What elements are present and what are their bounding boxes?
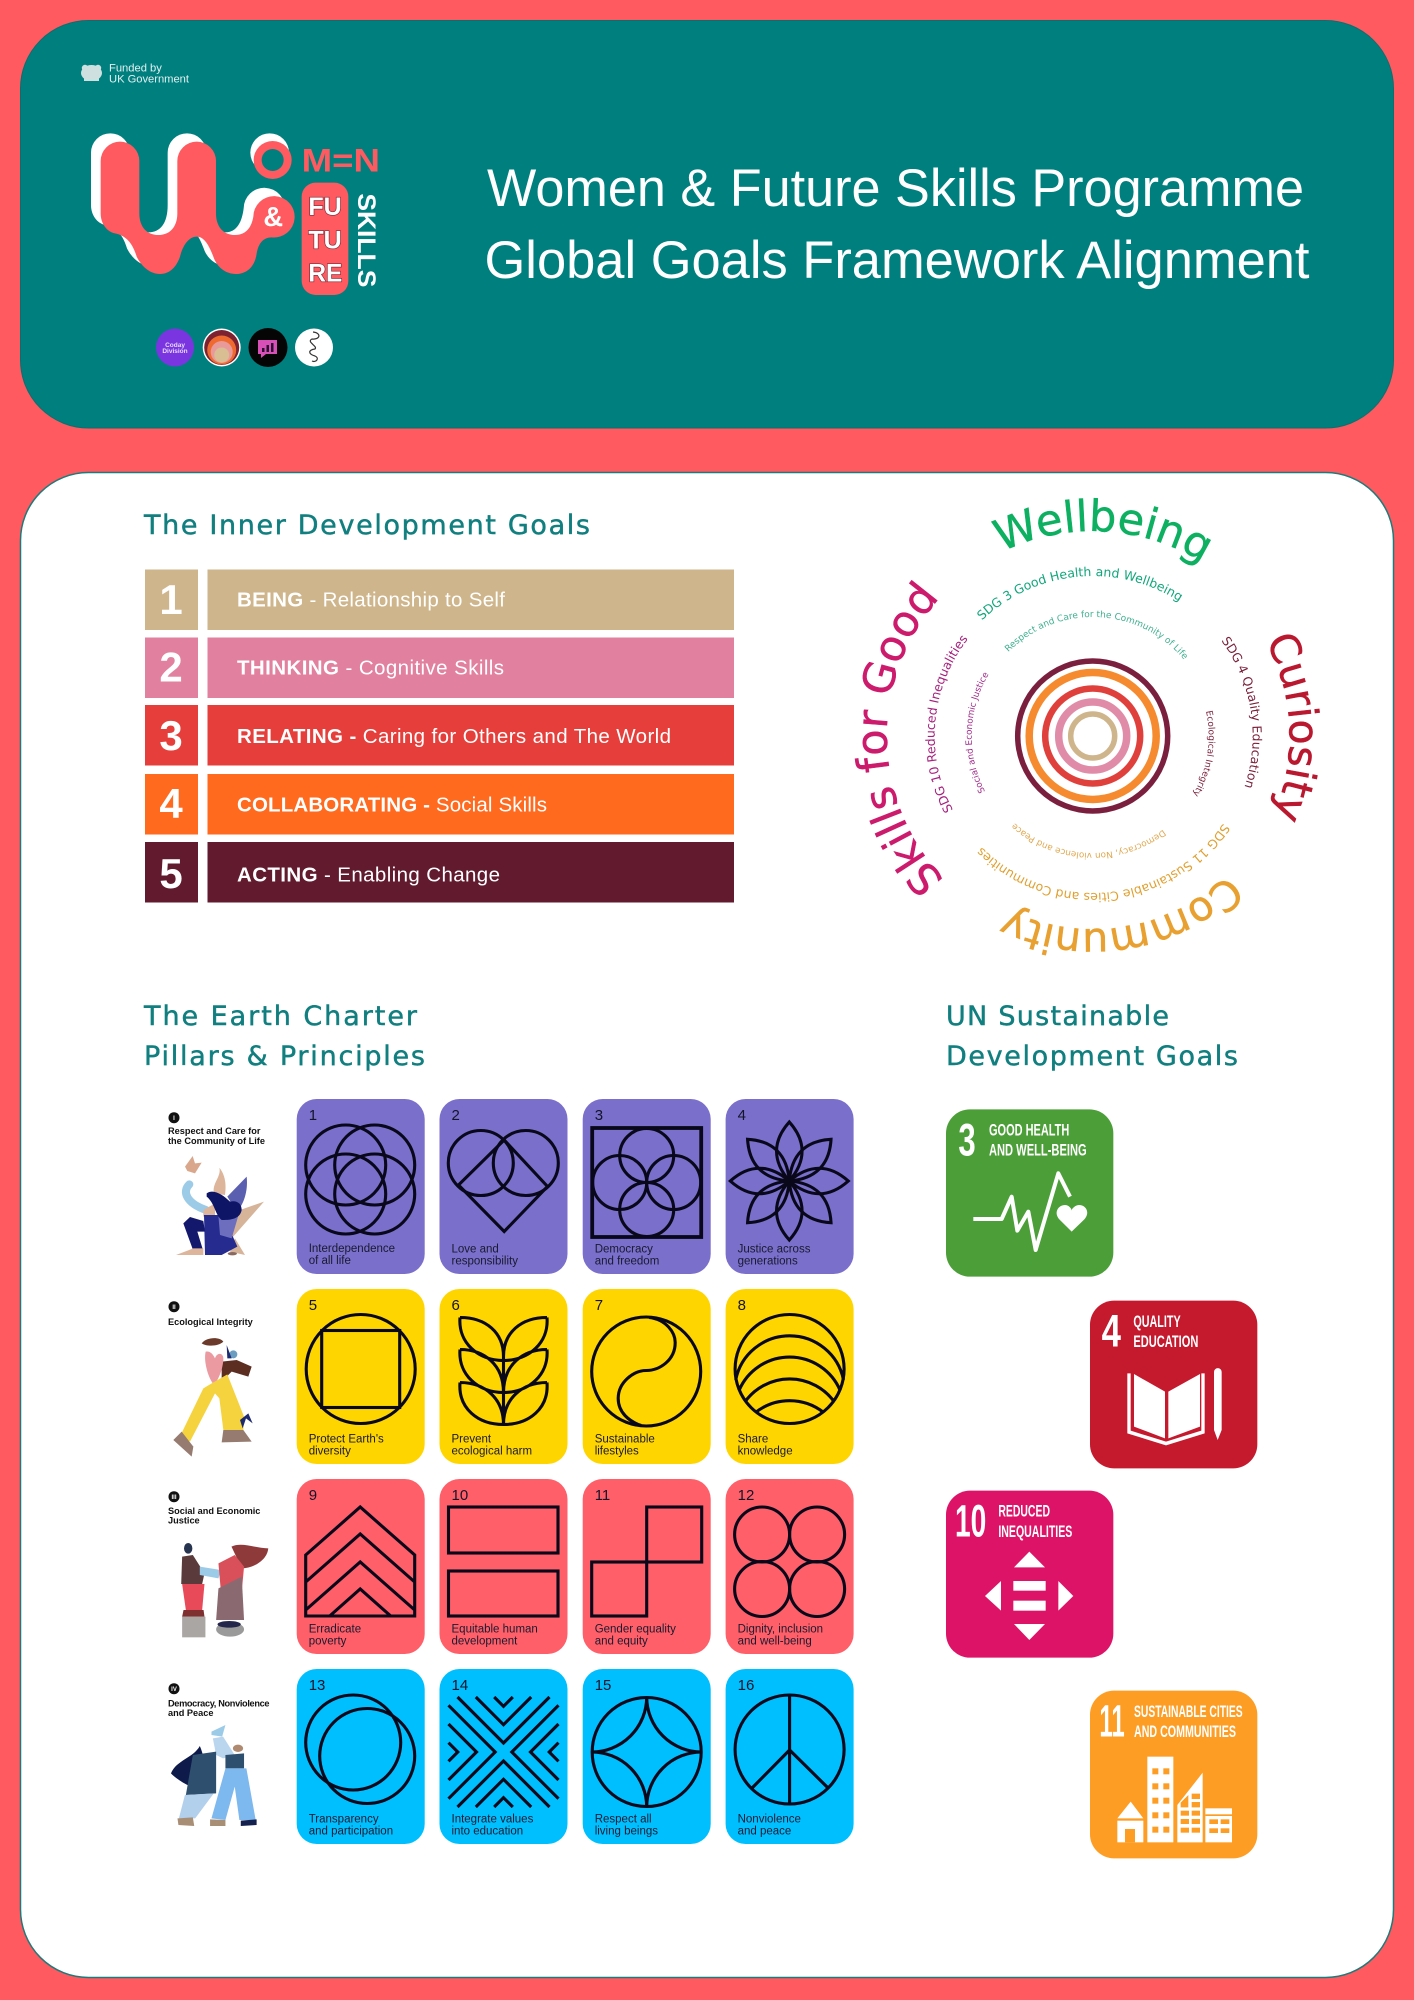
earth charter pillar IV: democracy, nonviolence and peace: Democracy, Nonviolence [168, 1699, 270, 1709]
card 5: protect earth's diversity: 5 [309, 1297, 317, 1314]
earth charter pillar II: ecological integrity: II [172, 1305, 176, 1311]
partner logos: Division [162, 348, 188, 355]
card 13: transparency and participation: Transparency [309, 1814, 379, 1826]
card 3: democracy and freedom: Democracy [595, 1244, 653, 1256]
ring text: Wellbeing: Wellbeing [991, 498, 1211, 566]
heading: The Earth Charter [143, 1001, 425, 1072]
SDG tile 3: good health and well-being [946, 1109, 1113, 1277]
programme logo: Women & Future Skills: & [263, 201, 283, 232]
earth charter pillar I: respect and care: Respect and Care for [168, 1126, 261, 1136]
card 4: justice across generations: Justice across [738, 1244, 811, 1256]
SDG tile 4: quality education: 4 [1102, 1306, 1121, 1357]
ring text: Wellbeing [977, 498, 1211, 660]
card 2: love and responsibility: responsibility [452, 1256, 518, 1268]
illustration: two figures high five [171, 1725, 257, 1826]
SDG tile 10: reduced inequalities: 10 [955, 1496, 986, 1547]
SDG tile 4: quality education: QUALITY [1133, 1312, 1181, 1331]
card 1: interdependence [297, 1099, 425, 1274]
earth charter pillar III: social and economic justice: Social and Economic [168, 1506, 260, 1516]
card 4: justice across generations: 4 [738, 1107, 746, 1124]
programme logo: Women & Future Skills: TU [308, 227, 342, 255]
principle cards grid [297, 1099, 854, 1844]
card 5: protect earth's diversity: Protect Earth's [309, 1434, 384, 1446]
ring text: Wellbeing: Respect and Care for the Community of Life [1004, 610, 1187, 660]
card 14: integrate values into education: Integrate values [452, 1814, 534, 1826]
partner logos: Coday [165, 342, 185, 349]
programme logo: Women & Future Skills [91, 133, 380, 295]
card 6: prevent ecological harm: Prevent [452, 1434, 492, 1446]
card 1: interdependence: 1 [309, 1107, 317, 1124]
card 13: transparency and participation: and participation [309, 1826, 393, 1838]
earth charter pillar III: social and economic justice: Justice [168, 1516, 200, 1526]
SDG tile 11: sustainable cities and communities: SUSTAINABLE CITIES [1134, 1702, 1243, 1721]
card 8: share knowledge [726, 1289, 854, 1464]
funder credit: UK Government [81, 62, 190, 86]
card 11: gender equality and equity: and equity [595, 1636, 648, 1648]
SDG tile 10: reduced inequalities: REDUCED [998, 1502, 1050, 1521]
title: Global Goals Framework Alignment [484, 231, 1310, 290]
card 3: democracy and freedom: and freedom [595, 1256, 659, 1268]
SDG tile 11: sustainable cities and communities: 11 [1099, 1696, 1125, 1747]
row 5: acting [145, 842, 734, 902]
earth charter pillar IV: democracy, nonviolence and peace: and Peace [168, 1708, 213, 1718]
earth charter pillar II: ecological integrity [168, 1301, 254, 1457]
card 15: respect all living beings: 15 [595, 1677, 611, 1694]
earth charter pillar III: social and economic justice [168, 1491, 268, 1637]
card 8: share knowledge: knowledge [738, 1446, 793, 1458]
programme logo: Women & Future Skills: SKILLS [352, 193, 380, 287]
heading: UN Sustainable Development Goals: Development Goals [946, 1041, 1238, 1072]
card 12: dignity, inclusion and well-being: Dignity, inclusion [738, 1624, 823, 1636]
concentric goal rings [1018, 661, 1168, 811]
SDG tile 4: quality education [1090, 1301, 1257, 1468]
row 4: collaborating: COLLABORATING - Social Skills [237, 794, 547, 816]
ring text: Curiosity: Ecological Integrity [1192, 710, 1216, 797]
funder credit: UK Government: Funded by [109, 62, 162, 74]
card 9: eradicate poverty: poverty [309, 1636, 347, 1648]
card 3: democracy and freedom [583, 1099, 711, 1274]
heading: UN Sustainable Development Goals: UN Sustainable [946, 1001, 1169, 1032]
SDG tile 11: sustainable cities and communities [1090, 1691, 1257, 1858]
ring text: Curiosity [1192, 634, 1320, 823]
card 16: nonviolence and peace: Nonviolence [738, 1814, 801, 1826]
card 10: equitable human development: 10 [452, 1487, 468, 1504]
card 12: dignity, inclusion and well-being: 12 [738, 1487, 754, 1504]
programme logo: Women & Future Skills: RE [308, 260, 342, 288]
partner logos [156, 328, 333, 367]
programme logo: Women & Future Skills: M=N [302, 142, 380, 178]
row 3: relating: 3 [159, 712, 183, 759]
SDG tile 10: reduced inequalities: INEQUALITIES [998, 1522, 1072, 1541]
card 15: respect all living beings: Respect all [595, 1814, 652, 1826]
earth charter pillar IV: democracy, nonviolence and peace: IV [171, 1687, 177, 1693]
title [484, 159, 1310, 290]
illustration: two figures shaking hands [181, 1543, 268, 1637]
card 4: justice across generations: generations [738, 1256, 798, 1268]
panel: header banner [20, 20, 1394, 428]
card 16: nonviolence and peace: and peace [738, 1826, 791, 1838]
ring text: Skills for Good: Skills for Good [854, 580, 942, 895]
card 7: sustainable lifestyles: 7 [595, 1297, 603, 1314]
card 11: gender equality and equity [583, 1479, 711, 1654]
ring text: Community: SDG 11 Sustainable Cities and Communities [978, 824, 1230, 902]
panel: main white content [20, 472, 1394, 1978]
card 6: prevent ecological harm [440, 1289, 568, 1464]
illustration: walking figure [173, 1338, 253, 1457]
card 2: love and responsibility: 2 [452, 1107, 460, 1124]
card 5: protect earth's diversity: diversity [309, 1446, 351, 1458]
row 1: being: 1 [159, 576, 183, 623]
card 15: respect all living beings: living beings [595, 1826, 658, 1838]
heading: The Earth Charter: The Earth Charter [143, 1001, 418, 1032]
card 11: gender equality and equity: 11 [595, 1487, 610, 1504]
card 2: love and responsibility [440, 1099, 568, 1274]
heading: The Inner Development Goals: The Inner Development Goals [143, 510, 590, 541]
card 7: sustainable lifestyles: lifestyles [595, 1446, 639, 1458]
SDG tile 3: good health and well-being: AND WELL-BEING [989, 1141, 1087, 1160]
icon: open book and pencil [1127, 1368, 1222, 1445]
card 7: sustainable lifestyles [583, 1289, 711, 1464]
card 14: integrate values into education [440, 1669, 568, 1844]
earth charter pillar I: respect and care: the Community of Life [168, 1136, 265, 1146]
card 11: gender equality and equity: Gender equality [595, 1624, 676, 1636]
card 10: equitable human development: Equitable human [452, 1624, 538, 1636]
card 9: eradicate poverty: 9 [309, 1487, 317, 1504]
card 6: prevent ecological harm: 6 [452, 1297, 460, 1314]
card 2: love and responsibility: Love and [452, 1244, 499, 1256]
icon: city buildings [1117, 1757, 1232, 1842]
ring text: Community: Community [999, 881, 1240, 956]
row 4: collaborating [145, 774, 734, 834]
SDG tile 10: reduced inequalities [946, 1491, 1113, 1658]
row 5: acting: 5 [159, 850, 183, 897]
ring text: Curiosity: SDG 4 Quality Education [1222, 636, 1262, 788]
earth charter pillar I: respect and care: I [173, 1116, 175, 1122]
card 14: integrate values into education: into education [452, 1826, 523, 1838]
row 3: relating: RELATING - Caring for Others and The World [237, 725, 671, 748]
illustration: figure with leaves [176, 1156, 264, 1255]
earth charter pillar II: ecological integrity: Ecological Integrity [168, 1317, 254, 1327]
card 12: dignity, inclusion and well-being: and well-being [738, 1636, 812, 1648]
card 13: transparency and participation: 13 [309, 1677, 325, 1694]
card 15: respect all living beings [583, 1669, 711, 1844]
row 1: being [145, 570, 734, 630]
card 12: dignity, inclusion and well-being [726, 1479, 854, 1654]
card 14: integrate values into education: 14 [452, 1677, 468, 1694]
card 4: justice across generations [726, 1099, 854, 1274]
heading: The Earth Charter: Pillars & Principles [144, 1041, 425, 1072]
heading: UN Sustainable Development Goals [946, 1001, 1238, 1072]
ring text: Community: Democracy, Non violence and Peace [1012, 824, 1166, 860]
programme logo: Women & Future Skills: FU [308, 193, 342, 221]
circular framework diagram [854, 498, 1320, 956]
row 1: being: BEING - Relationship to Self [237, 588, 505, 612]
SDG tile 11: sustainable cities and communities: AND COMMUNITIES [1134, 1722, 1236, 1741]
card 8: share knowledge: 8 [738, 1297, 746, 1314]
row 2: thinking [145, 638, 734, 698]
ring text: Skills for Good: SDG 10 Reduced Inequalities [925, 636, 967, 813]
ring text: Skills for Good: Social and Economic Justice [965, 672, 988, 794]
SDG tile 3: good health and well-being: 3 [958, 1114, 976, 1165]
earth charter pillar I: respect and care [168, 1112, 265, 1255]
card 16: nonviolence and peace: 16 [738, 1677, 754, 1694]
card 6: prevent ecological harm: ecological harm [452, 1446, 532, 1458]
row 2: thinking: THINKING - Cognitive Skills [237, 656, 504, 680]
card 10: equitable human development [440, 1479, 568, 1654]
card 1: interdependence: of all life [309, 1255, 351, 1267]
row 5: acting: ACTING - Enabling Change [237, 864, 500, 886]
card 5: protect earth's diversity [297, 1289, 425, 1464]
ring text: Community [978, 824, 1240, 956]
ring text: Skills for Good [854, 580, 988, 895]
earth charter pillar IV: democracy, nonviolence and peace [168, 1683, 270, 1826]
row 4: collaborating: 4 [159, 780, 183, 827]
ring text: Curiosity: Curiosity [1270, 634, 1320, 823]
card 3: democracy and freedom: 3 [595, 1107, 603, 1124]
title: Women & Future Skills Programme [487, 159, 1304, 218]
card 8: share knowledge: Share [738, 1434, 768, 1446]
icon: equality arrows [985, 1552, 1073, 1640]
card 1: interdependence: Interdependence [309, 1243, 395, 1255]
card 9: eradicate poverty: Erradicate [309, 1624, 361, 1636]
card 16: nonviolence and peace [726, 1669, 854, 1844]
card 9: eradicate poverty [297, 1479, 425, 1654]
card 10: equitable human development: development [452, 1636, 518, 1648]
SDG tile 4: quality education: EDUCATION [1133, 1332, 1198, 1351]
card 13: transparency and participation [297, 1669, 425, 1844]
table: inner development goals [145, 570, 734, 902]
row 2: thinking: 2 [159, 644, 183, 690]
SDG tile 3: good health and well-being: GOOD HEALTH [989, 1120, 1069, 1139]
ring text: Wellbeing: SDG 3 Good Health and Wellbeing [977, 566, 1182, 620]
earth charter pillar III: social and economic justice: III [171, 1495, 177, 1501]
card 7: sustainable lifestyles: Sustainable [595, 1434, 655, 1446]
funder credit: UK Government: UK Government [109, 74, 190, 86]
row 3: relating [145, 705, 734, 766]
icon: heartbeat and heart [973, 1173, 1087, 1250]
